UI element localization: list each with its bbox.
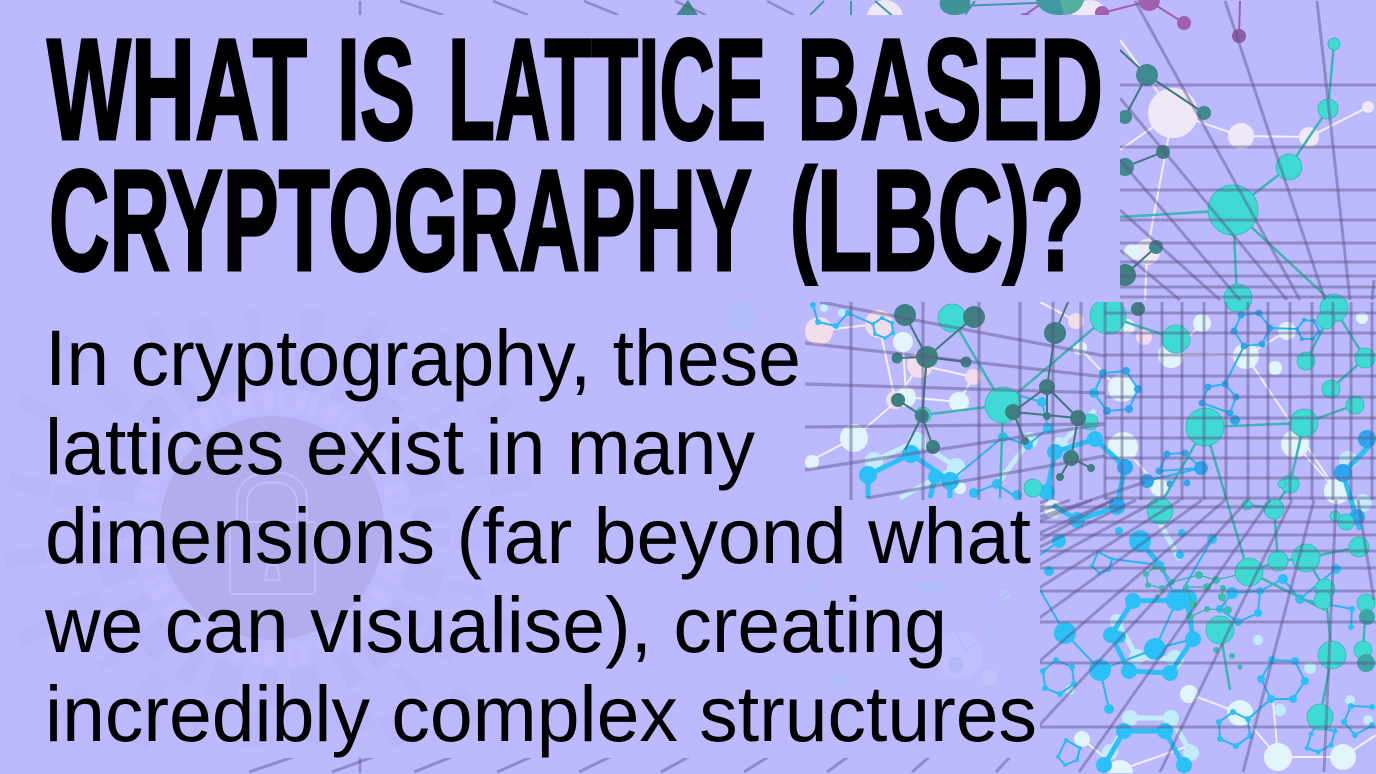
title: ( [790,143,817,286]
lock panel [0,302,1040,758]
blue molecule thick bonds [868,439,1373,766]
body text: lattices exist in many [45,402,755,491]
title panel background [0,15,1120,302]
blue molecule thin bonds [813,305,1373,765]
back wall grid [1105,302,1376,500]
body text: we can visualise), creating [44,580,947,669]
bright teal nodes [915,38,1375,730]
top strip nodes [676,0,1246,43]
darker blue nodes [1099,310,1376,525]
body text [44,313,1037,758]
title: ? [1030,140,1085,301]
title: BASED [797,9,1103,170]
ceiling grid [1120,1,1376,300]
faint molecule remnants [728,302,1038,688]
small teal cluster bonds [1146,567,1249,617]
icon: padlock [230,472,315,594]
title: LATTICE [448,9,766,170]
body text: incredibly complex structures [45,669,1037,758]
dark teal nodes [891,64,1375,672]
title: LBC [817,140,1003,301]
body text: dimensions (far beyond what [45,491,1031,580]
title: IS [337,9,415,170]
molecule network [676,0,1376,773]
dark teal molecule bonds [897,50,1204,477]
radial rings behind the lock [5,320,540,745]
floor grid [249,500,1376,772]
body text: In cryptography, these [45,313,801,402]
title: CRYPTOGRAPHY [49,140,752,301]
title [47,9,1103,301]
pale white molecule bonds [808,40,1376,770]
pink, white and pale nodes [805,0,1374,773]
left wall grid [805,302,1145,540]
teal bonds [923,44,1366,717]
top strip lines [360,1,794,773]
blue nodes [810,302,1375,773]
small teal cluster nodes [1143,564,1242,670]
panel fill [0,302,1040,758]
light blue molecule bonds [874,410,1191,753]
title: WHAT [47,9,307,170]
title: ) [1003,143,1030,286]
